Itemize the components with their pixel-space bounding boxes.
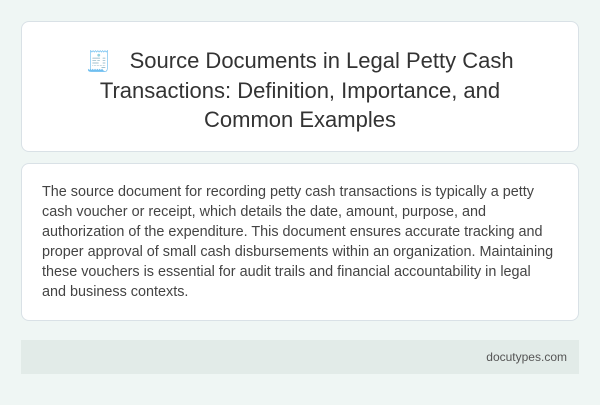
title: 🧾 Source Documents in Legal Petty Cash (86, 48, 514, 73)
description text: The source document for recording petty cash transactions is typically a petty (42, 184, 534, 200)
description text: proper approval of small cash disbursements within an organization. Maintaining (42, 244, 553, 260)
description card (21, 163, 579, 321)
description text (42, 184, 553, 300)
footer: docutypes.com (486, 350, 567, 364)
description text: these vouchers is essential for audit trails and financial accountability in legal (42, 264, 531, 280)
title (86, 48, 514, 132)
footer (21, 340, 579, 374)
description text: authorization of the expenditure. This document ensures accurate tracking and (42, 224, 543, 240)
title card (21, 21, 579, 152)
title: Common Examples (204, 107, 396, 132)
description text: cash voucher or receipt, which details the date, amount, purpose, and (42, 204, 486, 220)
title: Transactions: Definition, Importance, and (100, 78, 500, 102)
description text: and business contexts. (42, 284, 188, 300)
